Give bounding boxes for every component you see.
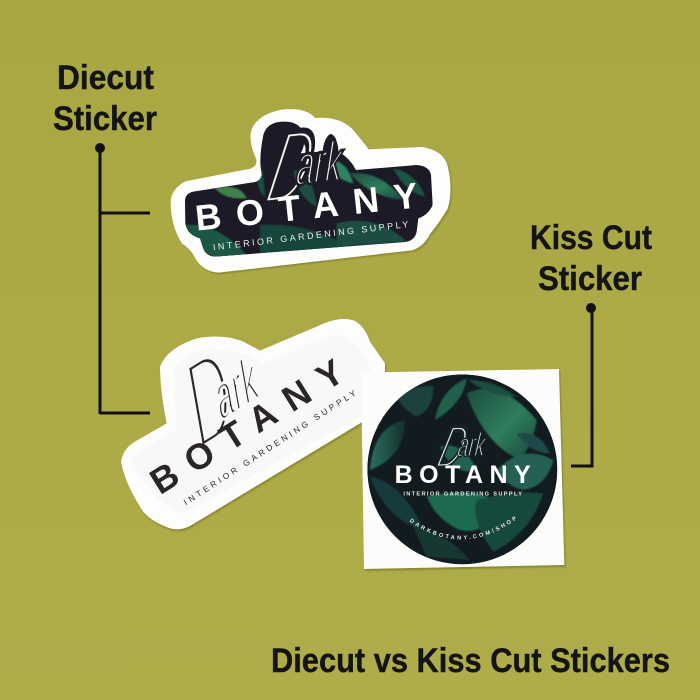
logo text: tagline: INTERIOR GARDENING SUPPLY xyxy=(212,219,409,252)
leaf photo fill xyxy=(185,122,433,257)
logo text: tagline: INTERIOR GARDENING SUPPLY xyxy=(403,491,522,497)
label: Kiss Cut Sticker xyxy=(530,219,652,298)
label: Kiss Cut Sticker: Sticker xyxy=(538,260,642,298)
label: Diecut Sticker xyxy=(53,59,157,138)
circular leaf photo xyxy=(367,374,557,564)
sticker: diecut white botany xyxy=(121,319,386,531)
inner light panel xyxy=(132,335,373,512)
logo text: BOTANY: BOTANY xyxy=(193,175,420,239)
logo text: url curved xyxy=(409,517,520,540)
callout lines: Diecut xyxy=(95,143,150,414)
title: Diecut vs Kiss Cut Stickers xyxy=(271,642,670,680)
logo text: Dark: ark xyxy=(292,129,348,199)
callout line: Kiss Cut xyxy=(571,303,596,466)
label: Diecut Sticker: Diecut xyxy=(57,59,154,97)
logo text: Dark: D xyxy=(178,319,241,478)
logo text: Dark: D xyxy=(428,413,479,480)
sticker: kiss cut round: DARKBOTANY.COM/SHOP xyxy=(410,516,516,540)
logo text: tagline: INTERIOR GARDENING SUPPLY xyxy=(182,388,358,507)
logo text: Dark: D xyxy=(253,106,331,227)
label: Diecut Sticker: Sticker xyxy=(53,100,157,138)
logo text: BOTANY: BOTANY xyxy=(395,461,531,489)
sticker: kiss cut round xyxy=(362,369,566,572)
sticker: diecut dark botany xyxy=(171,106,452,274)
logo text: Dark: ark xyxy=(210,340,263,435)
logo text: BOTANY: BOTANY xyxy=(143,351,351,502)
label: Kiss Cut Sticker: Kiss Cut xyxy=(530,219,652,257)
logo text: Dark: ark xyxy=(454,426,490,464)
